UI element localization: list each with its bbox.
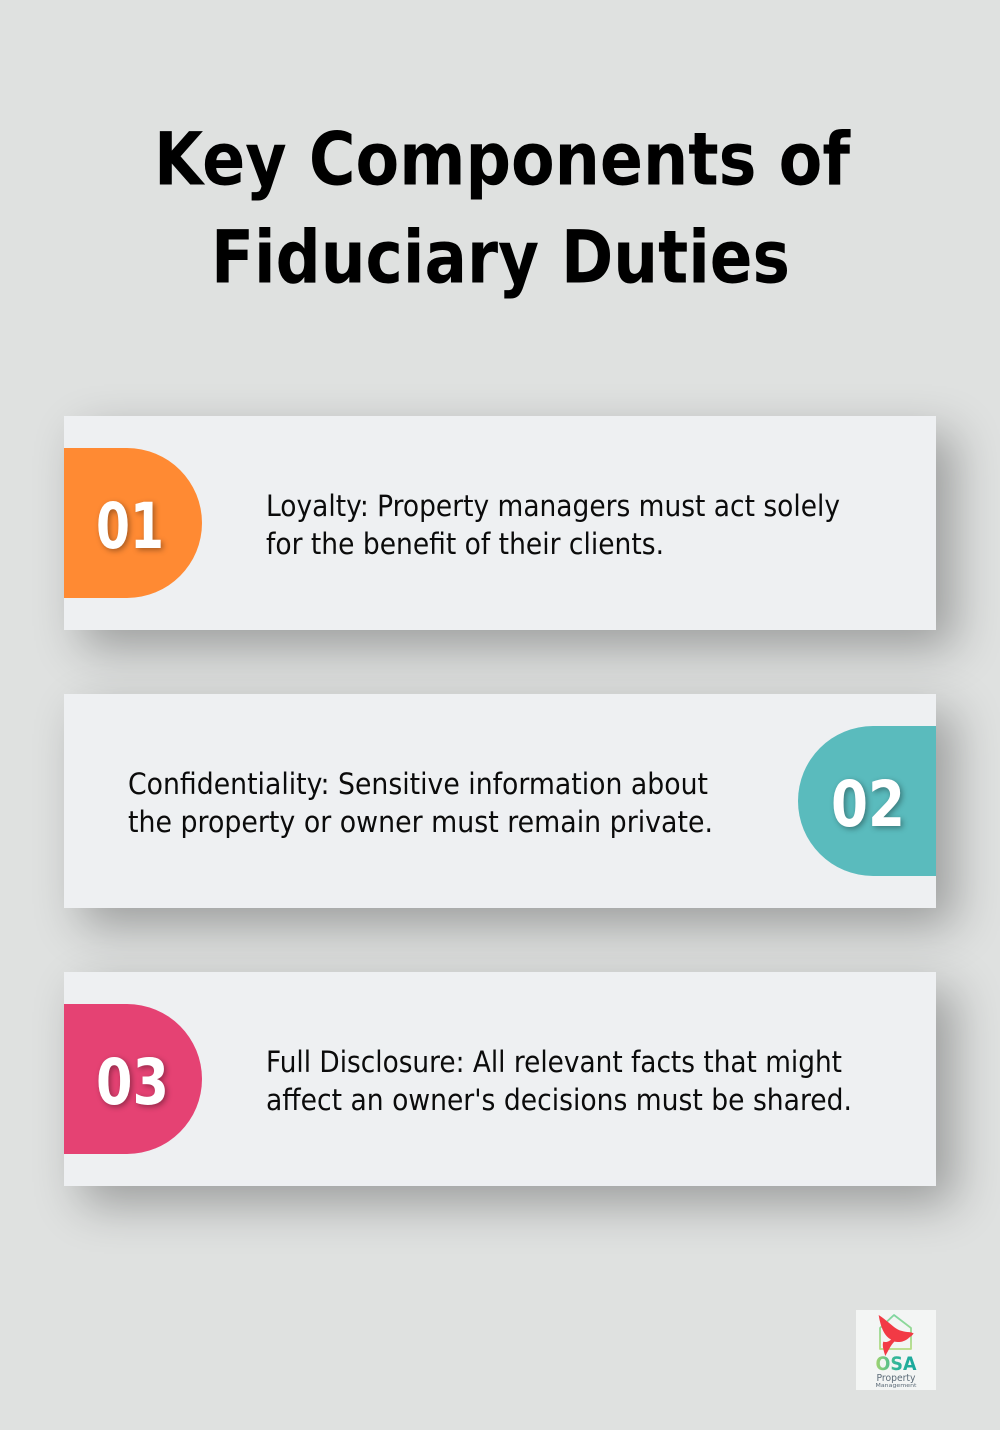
badge: 01 [64, 448, 202, 598]
badge: 03: 03 [96, 1046, 169, 1119]
text: loyalty: for the benefit of their clients. [266, 527, 664, 561]
panel: step 03 full disclosure [64, 972, 936, 1186]
title: Fiduciary Duties [211, 216, 790, 300]
badge: 02 [798, 726, 936, 876]
badge: 01: 01 [96, 490, 164, 563]
text: full disclosure: Full Disclosure: All relevant facts that might [266, 1045, 842, 1079]
panel: step 01 loyalty [64, 416, 936, 630]
text: loyalty: Loyalty: Property managers must act solely [266, 489, 840, 523]
text: confidentiality: the property or owner must remain private. [128, 805, 713, 839]
logo: OSA Property Management: Management [876, 1383, 917, 1389]
text: confidentiality: Confidentiality: Sensitive information about [128, 767, 708, 801]
icon: red bird [879, 1315, 914, 1356]
panel: step 02 confidentiality [64, 694, 936, 908]
logo wordmark: OSA [876, 1353, 917, 1375]
badge: 03 [64, 1004, 202, 1154]
text: confidentiality [128, 767, 713, 839]
logo: OSA Property Management [856, 1310, 936, 1390]
title [154, 118, 851, 300]
title: Key Components of [154, 118, 851, 202]
text: full disclosure [266, 1045, 852, 1117]
text: loyalty [266, 489, 840, 561]
text: full disclosure: affect an owner's decisions must be shared. [266, 1083, 852, 1117]
icon: house outline [880, 1315, 911, 1349]
badge: 02: 02 [831, 768, 905, 841]
logo: OSA Property Management: Property [876, 1373, 916, 1384]
